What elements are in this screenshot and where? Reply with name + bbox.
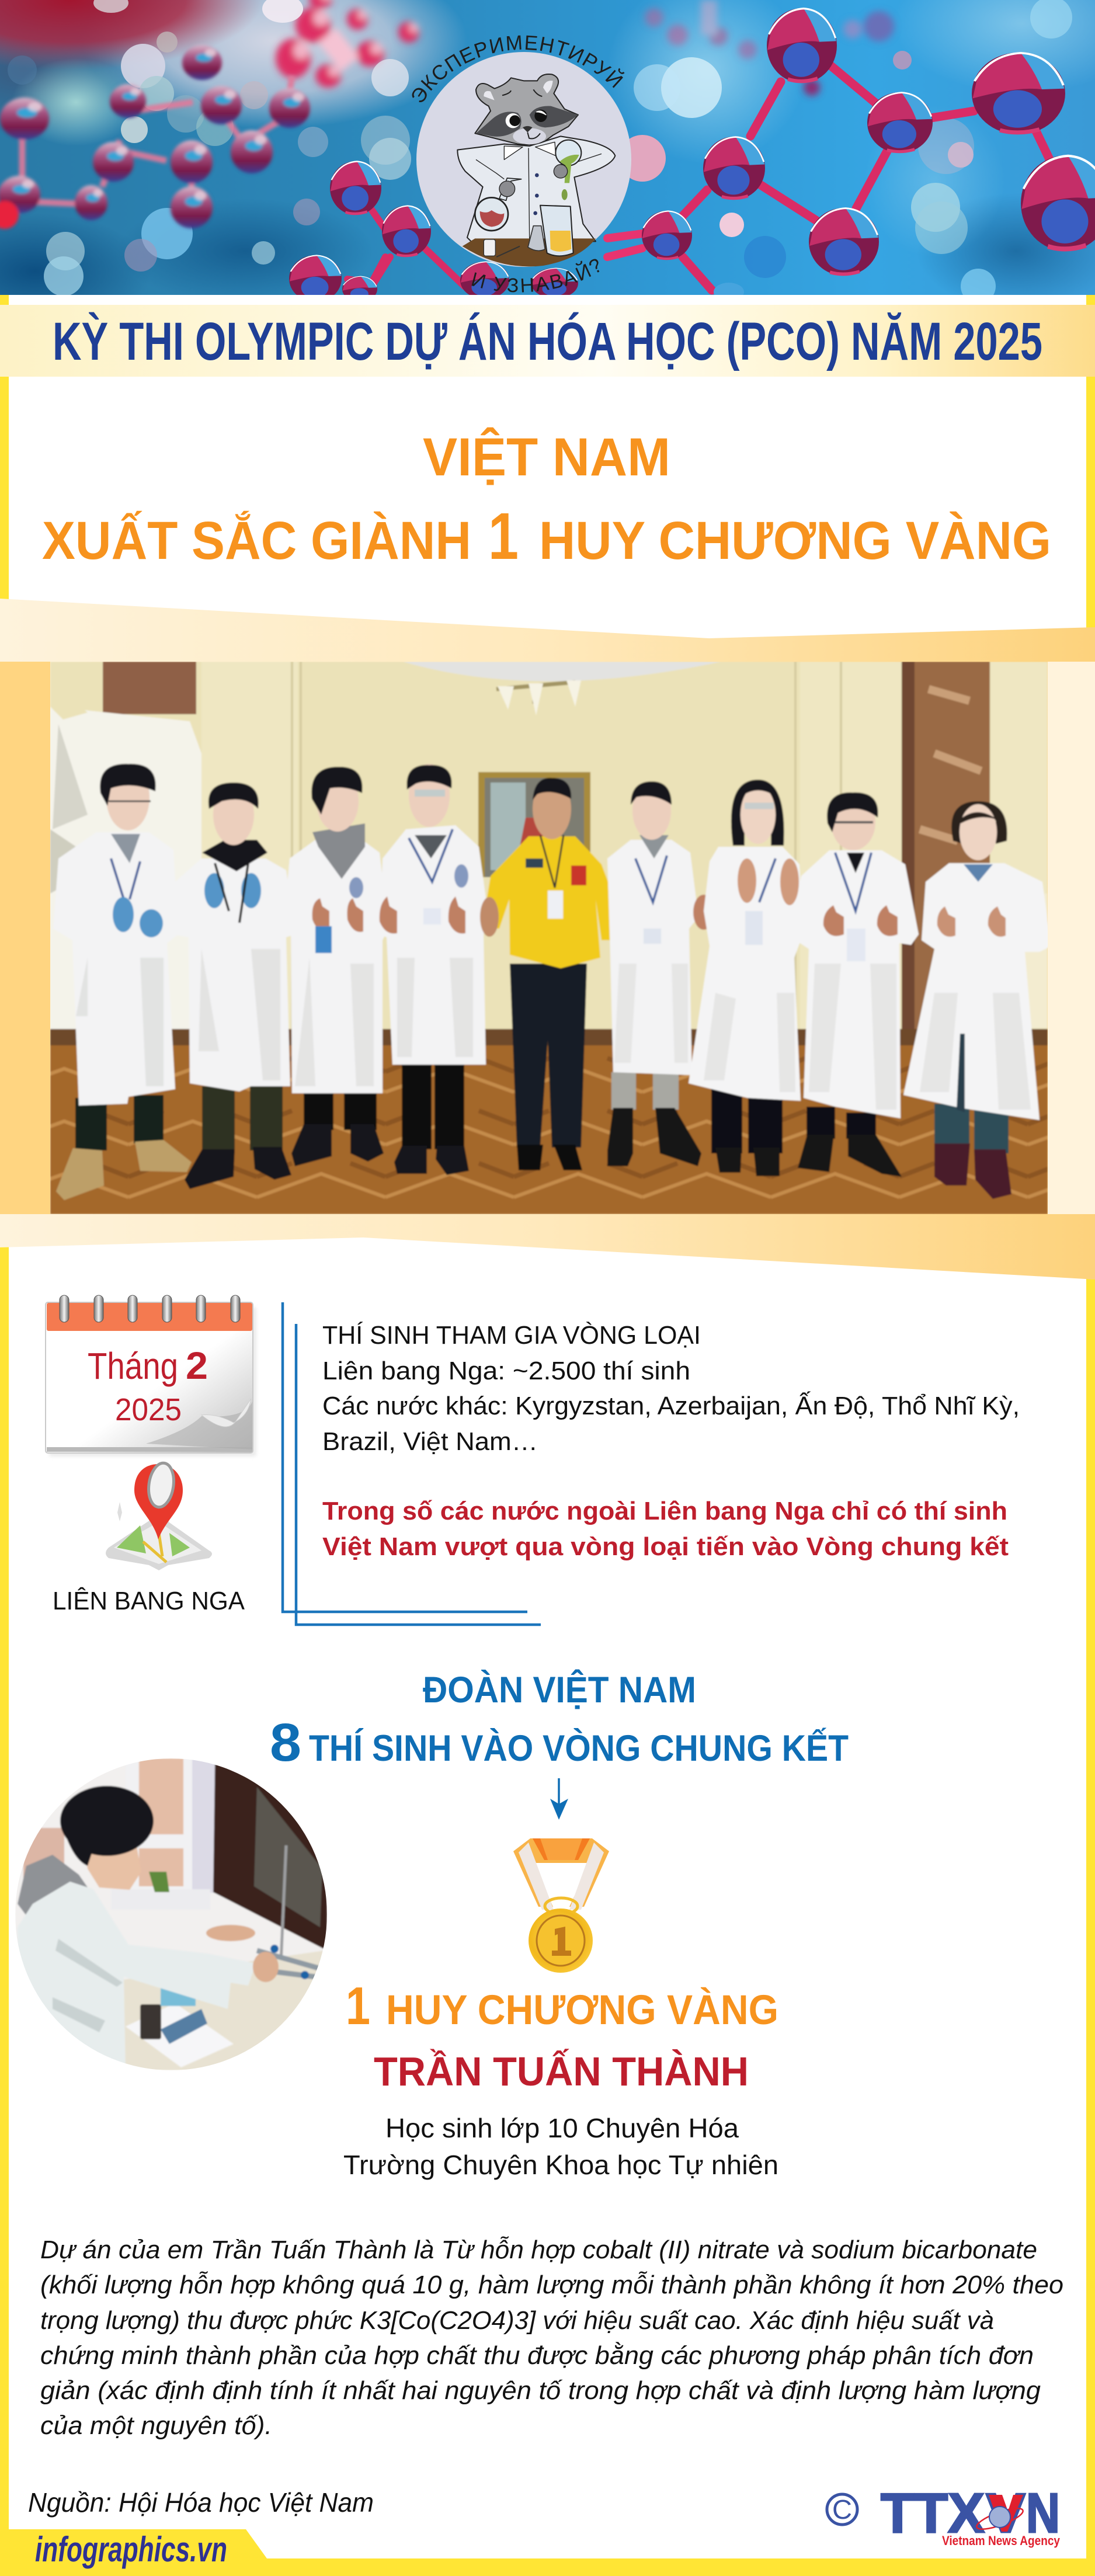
callout: Vietnam only foreign finalist: Việt Nam vượt qua vòng loại tiến vào Vòng chung kết	[322, 1532, 1009, 1561]
mascot: raccoon scientist	[457, 74, 615, 266]
head	[475, 74, 578, 145]
mascot disc	[416, 52, 631, 267]
text block: qualifying round: Brazil, Việt Nam…	[322, 1427, 538, 1456]
floor and baseboard	[50, 1029, 1048, 1047]
person 6	[607, 781, 714, 1166]
TTXVN logo: C	[832, 2494, 852, 2525]
circular photo: student in the lab	[15, 1758, 327, 2079]
heading: delegation	[270, 1669, 849, 1772]
TTXVN logo: TTX	[881, 2482, 985, 2544]
project description paragraph: của một nguyên tố).	[40, 2411, 272, 2440]
headline: XUẤT SẮC GIÀNH	[42, 510, 471, 571]
title band	[0, 305, 1095, 377]
calendar date: 2	[186, 1344, 208, 1387]
text block: qualifying round: THÍ SINH THAM GIA VÒNG LOẠI	[322, 1321, 701, 1350]
beakers and jar	[528, 226, 545, 251]
teacher in yellow jacket	[480, 778, 645, 1170]
bokeh lights	[8, 0, 1072, 304]
headline	[42, 427, 1051, 573]
medal count heading	[346, 1977, 778, 2036]
calendar rings	[60, 1295, 240, 1322]
calendar date: 2025	[115, 1392, 182, 1427]
heading: delegation: THÍ SINH VÀO VÒNG CHUNG KẾT	[309, 1727, 849, 1769]
banner: chemistry molecules with mascot	[0, 0, 1095, 295]
red flask	[499, 178, 522, 200]
calendar date: Tháng	[88, 1345, 178, 1387]
arrow down	[550, 1778, 568, 1820]
TTXVN logo: V	[986, 2482, 1026, 2544]
TTXVN logo: Vietnam News Agency	[942, 2533, 1061, 2548]
person 8	[791, 792, 919, 1177]
winner school: Học sinh lớp 10 Chuyên Hóa	[385, 2113, 739, 2143]
source: Nguồn: Hội Hóa học Việt Nam	[28, 2487, 374, 2518]
footer bar with site tab	[0, 2529, 1095, 2576]
painting and lamp	[478, 772, 590, 877]
headline: 1	[488, 499, 519, 573]
mascot caption in Russian	[412, 35, 625, 292]
distant molecules	[0, 45, 310, 229]
winner school: Trường Chuyên Khoa học Tự nhiên	[343, 2150, 778, 2180]
project description paragraph: chứng minh thành phần của hợp chất thu được bằng các phương pháp phân tích đơn	[40, 2341, 1034, 2370]
text block: qualifying round	[322, 1321, 1020, 1456]
location label: LIÊN BANG NGA	[53, 1587, 245, 1615]
callout: Vietnam only foreign finalist: Trong số các nước ngoài Liên bang Nga chỉ có thí sinh	[322, 1497, 1007, 1525]
pink out-of-focus atoms	[276, 0, 894, 96]
heading: delegation: ĐOÀN VIỆT NAM	[423, 1669, 696, 1711]
person 4	[380, 764, 488, 1175]
text block: qualifying round: Liên bang Nga: ~2.500 thí sinh	[322, 1357, 690, 1385]
decorative ribbon behind photo	[0, 599, 1095, 1280]
winner name: TRẦN TUẤN THÀNH	[374, 2049, 749, 2094]
heading: delegation: 8	[270, 1713, 301, 1772]
person 1	[53, 764, 192, 1200]
double blue bracket lines	[283, 1302, 541, 1625]
project description paragraph	[40, 2236, 1063, 2440]
project description paragraph: trọng lượng) thu được phức K3[Co(C2O4)3] với hiệu suất cao. Xác định hiệu suất và	[40, 2306, 994, 2335]
site url: infographics.vn	[35, 2530, 227, 2569]
green flask	[555, 140, 581, 166]
map pin icon	[106, 1461, 212, 1570]
person 9	[903, 801, 1051, 1199]
person 2	[173, 783, 295, 1189]
TTXVN logo: N	[1026, 2482, 1060, 2544]
person 7	[689, 780, 803, 1176]
gold medal icon	[513, 1838, 609, 1973]
project description paragraph: (khối lượng hỗn hợp không quá 10 g, hàm lượng mỗi thành phần không ít hơn 20% theo	[40, 2271, 1063, 2299]
white letter sculpture	[50, 707, 201, 1159]
medal count heading: HUY CHƯƠNG VÀNG	[386, 1987, 778, 2033]
headline: HUY CHƯƠNG VÀNG	[539, 511, 1051, 571]
callout: Vietnam only foreign finalist	[322, 1497, 1009, 1561]
person 3	[286, 767, 388, 1166]
photo: Vietnamese delegation group	[50, 662, 1051, 1214]
text block: qualifying round: Các nước khác: Kyrgyzstan, Azerbaijan, Ấn Độ, Thổ Nhĩ Kỳ,	[322, 1391, 1020, 1420]
TTXVN logo	[827, 2482, 1061, 2548]
medal count heading: 1	[346, 1977, 370, 2036]
headline: VIỆT NAM	[423, 427, 670, 487]
project description paragraph: Dự án của em Trần Tuấn Thành là Từ hỗn hợp cobalt (II) nitrate và sodium bicarbonate	[40, 2236, 1037, 2264]
mascot caption in Russian: И УЗНАВАЙ?	[472, 259, 599, 292]
foreground molecule atoms	[289, 8, 1095, 302]
calendar icon	[46, 1295, 256, 1456]
winner school	[343, 2113, 778, 2180]
foreground molecule bonds	[347, 62, 1052, 292]
calendar date	[88, 1344, 208, 1427]
mascot caption in Russian: ЭКСПЕРИМЕНТИРУЙ	[412, 35, 627, 131]
project description paragraph: giản (xác định định tính ít nhất hai nguyên tố trong hợp chất và định lượng hàm lượng	[40, 2376, 1041, 2405]
calendar page curl	[146, 1402, 252, 1449]
table	[463, 238, 596, 266]
lab coat	[457, 136, 615, 241]
